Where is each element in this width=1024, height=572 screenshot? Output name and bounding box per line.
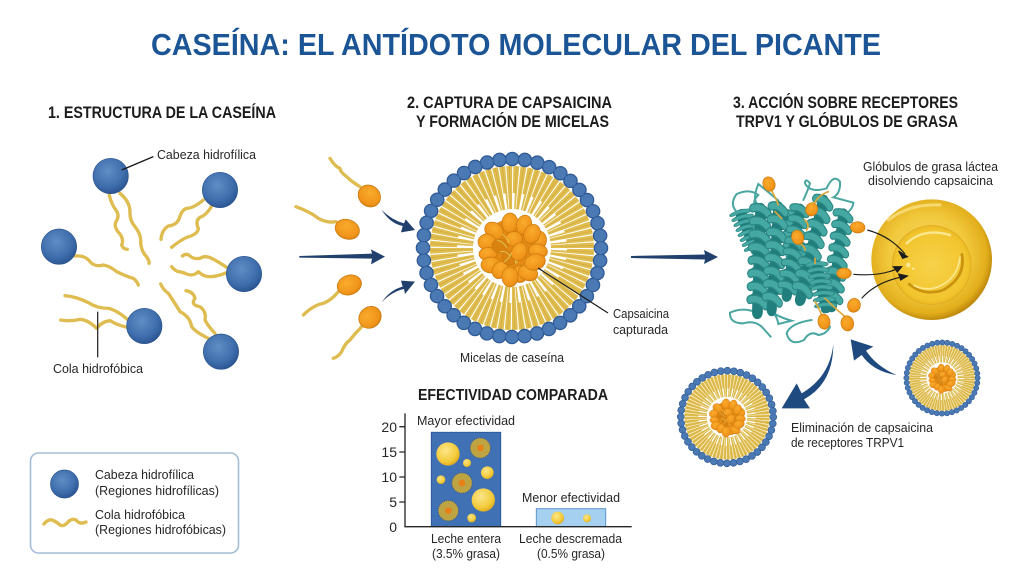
bar: leche descremada [536, 509, 606, 527]
label: cabeza hidrofílica: Cabeza hidrofílica [157, 147, 257, 162]
curved arrows between receptor and micelles [782, 339, 897, 408]
capsaicin tails on receptor [772, 191, 845, 317]
illustration: micelle leaving [681, 371, 773, 463]
label: eliminación de capsaicina [791, 420, 934, 450]
label: leche descremada: (0.5% grasa) [537, 546, 605, 561]
label: mayor efectividad: Mayor efectividad [417, 413, 515, 428]
icon: cola [44, 519, 86, 526]
illustration: casein molecules [41, 157, 262, 369]
arrows into fat globule [853, 230, 907, 298]
chart: bars [381, 413, 632, 535]
y axis labels: 5 [389, 494, 397, 510]
y axis labels [381, 419, 397, 535]
arrow: micelle to receptor [631, 250, 718, 264]
legend [30, 453, 238, 553]
heading: sección 3: TRPV1 Y GLÓBULOS DE GRASA [736, 112, 958, 131]
label: capsaicina capturada: Capsaicina [613, 306, 670, 321]
icon: cabeza [50, 470, 78, 498]
label: leche descremada: Leche descremada [519, 531, 623, 546]
label: leche entera: (3.5% grasa) [432, 546, 500, 561]
y axis labels: 0 [389, 519, 397, 535]
panel: estructura de la caseína [41, 103, 276, 376]
bar: leche entera [431, 432, 501, 527]
y axis labels: 15 [381, 444, 397, 460]
label: glóbulos de grasa: Glóbulos de grasa láctea [863, 159, 999, 174]
heading: sección 3: 3. ACCIÓN SOBRE RECEPTORES [733, 93, 958, 112]
label: glóbulos de grasa [863, 159, 999, 188]
label: glóbulos de grasa: disolviendo capsaicina [868, 173, 994, 188]
heading: sección 2: 2. CAPTURA DE CAPSAICINA [407, 94, 612, 112]
legend text: cabeza: Cabeza hidrofílica [95, 467, 195, 482]
label: capsaicina capturada [613, 306, 670, 337]
label: micelas de caseína: Micelas de caseína [460, 350, 565, 365]
illustration: capsaicin molecules and arrows [296, 158, 415, 358]
illustration: TRPV1 receptor [730, 179, 853, 342]
legend text: regiones hidrofóbicas: (Regiones hidrofóbicas) [95, 522, 226, 537]
legend text: regiones hidrofílicas: (Regiones hidrofílicas) [95, 483, 219, 498]
panel: acción sobre receptores [631, 93, 999, 463]
y axis labels: 10 [381, 469, 397, 485]
leader line: capsaicina capturada [538, 268, 608, 313]
label: leche descremada [519, 531, 623, 561]
legend text: cola: Cola hidrofóbica [95, 507, 186, 522]
y axis labels: 20 [381, 419, 397, 435]
label: eliminación de capsaicina: Eliminación de capsaicina [791, 420, 934, 435]
heading: sección 3 [733, 93, 958, 131]
label: menor efectividad: Menor efectividad [522, 490, 620, 505]
illustration: large casein micelle [423, 159, 601, 337]
label: leche entera [431, 531, 502, 561]
label: eliminación de capsaicina: de receptores TRPV1 [791, 435, 904, 450]
heading: sección 1: 1. ESTRUCTURA DE LA CASEÍNA [48, 103, 276, 122]
panel: captura de capsaicina [296, 94, 670, 365]
capsaicin molecules on receptor [761, 175, 865, 332]
heading: sección 2 [407, 94, 612, 131]
heading: efectividad comparada: EFECTIVIDAD COMPARADA [418, 387, 608, 404]
label: cola hidrofóbica: Cola hidrofóbica [53, 361, 144, 376]
illustration: micelle arriving [906, 342, 978, 414]
title: CASEÍNA: EL ANTÍDOTO MOLECULAR DEL PICANTE [151, 27, 881, 62]
label: capsaicina capturada: capturada [613, 322, 669, 337]
panel: efectividad comparada [381, 387, 632, 561]
heading: sección 2: Y FORMACIÓN DE MICELAS [416, 112, 609, 131]
label: leche entera: Leche entera [431, 531, 502, 546]
illustration: milk fat globule [871, 199, 992, 320]
